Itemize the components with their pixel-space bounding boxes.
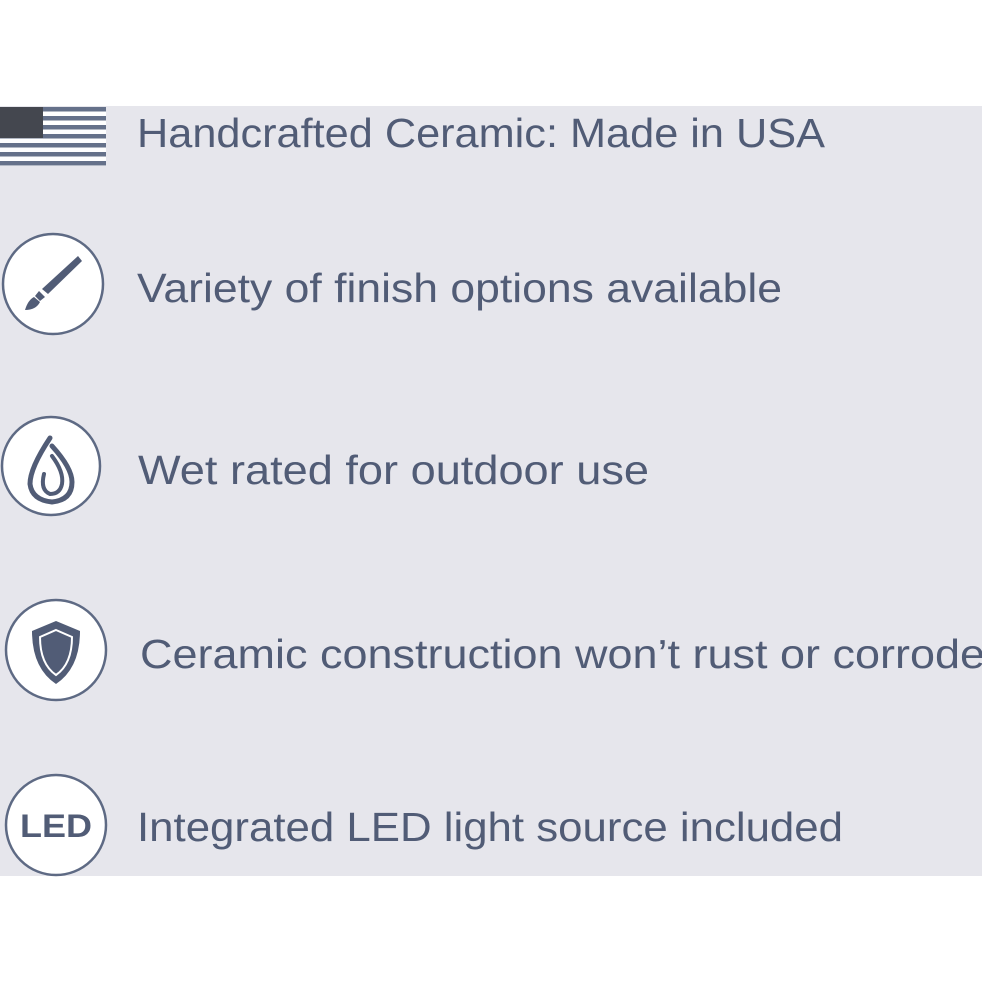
icon: shield xyxy=(6,600,106,700)
text: made in USA: Handcrafted Ceramic: Made in USA xyxy=(137,110,826,156)
icon: water drop xyxy=(2,417,100,515)
icon: paint brush xyxy=(3,234,103,334)
text: wet rated: Wet rated for outdoor use xyxy=(138,447,649,493)
text: finish options: Variety of finish options available xyxy=(137,265,782,311)
text: integrated LED: Integrated LED light source included xyxy=(137,804,843,850)
text: won't rust: Ceramic construction won’t rust or corrode xyxy=(140,631,982,677)
icon: USA flag xyxy=(0,107,106,166)
panel: features background xyxy=(0,106,982,876)
icon: LED: LED xyxy=(20,808,92,844)
icon: LED xyxy=(6,775,106,875)
